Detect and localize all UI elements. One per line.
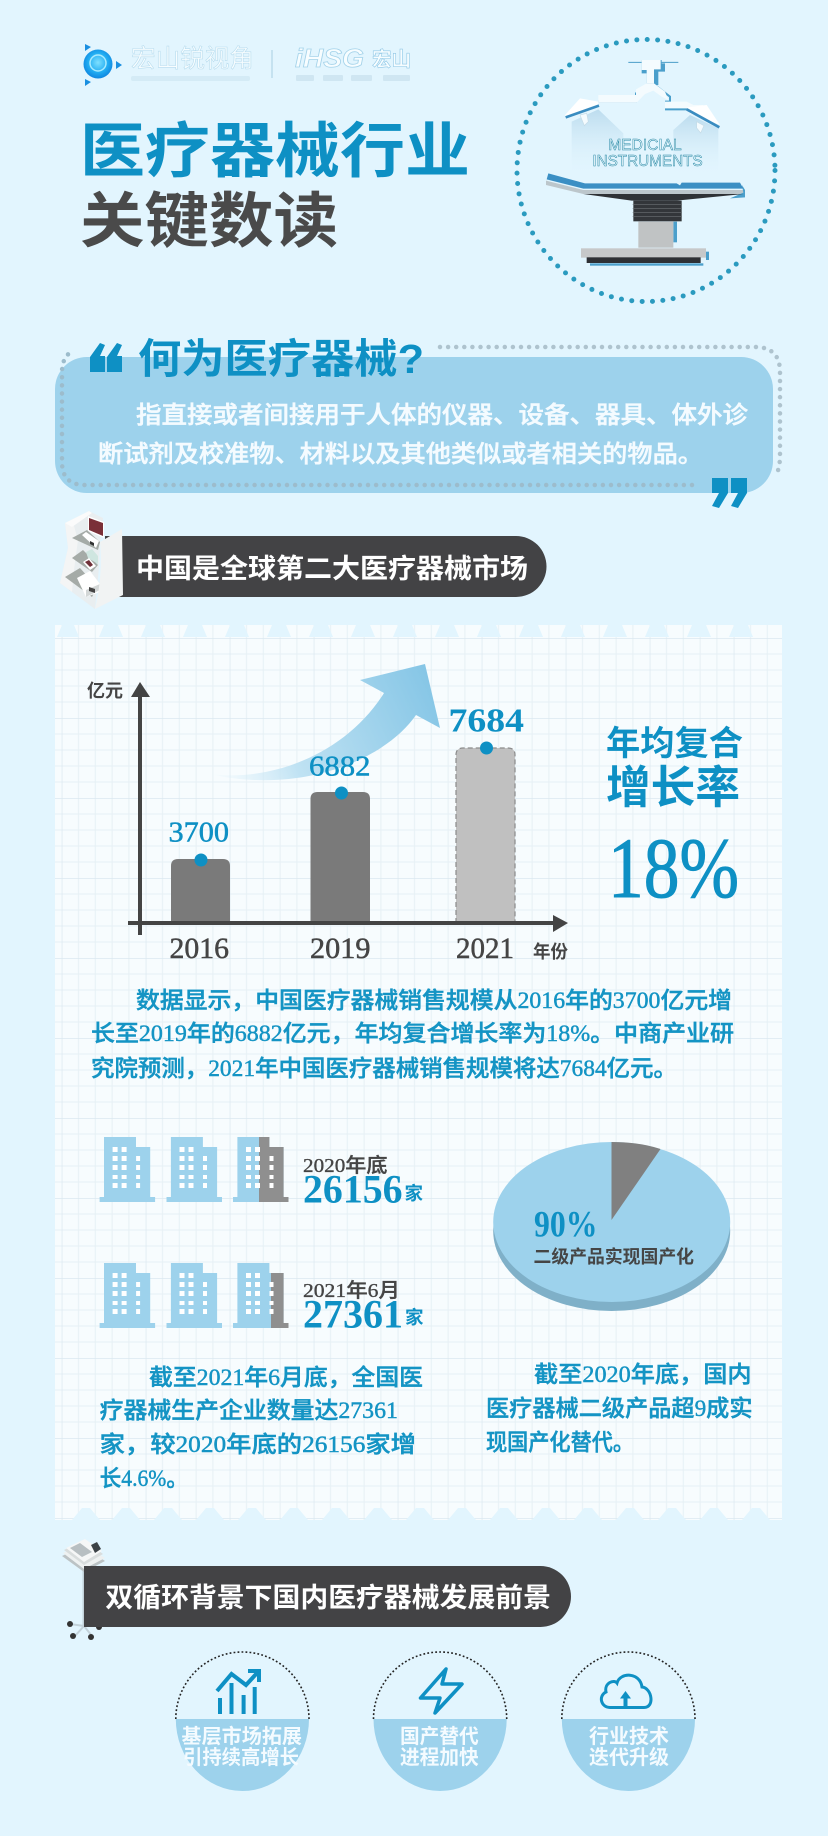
icon: lightning bolt <box>420 1669 462 1713</box>
pie chart: 90% localisation: 二级产品实现国产化 <box>534 1246 694 1267</box>
section heading: dual circulation <box>84 1566 571 1627</box>
icon: equipment shelf <box>60 511 123 609</box>
illustration label <box>592 137 703 170</box>
definition text: 指直接或者间接用于人体的仪器、设备、器具、体外诊 <box>136 402 748 429</box>
text block: class II localisation <box>486 1362 752 1455</box>
title: 医疗器械行业 <box>80 118 470 185</box>
section heading: China market: 中国是全球第二大医疗器械市场 <box>136 554 528 584</box>
icon: growth chart <box>217 1671 259 1714</box>
pie chart: 90% localisation: 90% <box>534 1204 598 1246</box>
icon: instrument cart <box>62 1539 105 1640</box>
text block: market description <box>91 988 734 1081</box>
stat: 2021 enterprise count: 家 <box>405 1307 424 1328</box>
badge: grassroots market <box>176 1652 309 1791</box>
text block: class II localisation: 现国产化替代。 <box>486 1430 634 1455</box>
badge: technology iteration: 行业技术 <box>589 1725 669 1748</box>
heading: 何为医疗器械? <box>138 336 424 382</box>
brand mark: iHSG <box>295 43 364 73</box>
illustration label: MEDICIAL <box>608 137 682 154</box>
text block: market description: 数据显示，中国医疗器械销售规模从2016年的3700亿元增 <box>136 988 732 1013</box>
callout: CAGR 18%: 年均复合 <box>606 725 743 763</box>
text block: enterprise count: 截至2021年6月底，全国医 <box>149 1365 423 1390</box>
icon: closing quote <box>712 478 747 508</box>
icon row: buildings June 2021 <box>100 1263 288 1328</box>
icon row: buildings end of 2020 <box>100 1137 288 1202</box>
title <box>80 118 470 255</box>
illustration: operating table in dotted circle <box>517 40 775 302</box>
callout: CAGR 18%: 增长率 <box>606 762 740 813</box>
bar 2016 <box>168 816 230 965</box>
section heading: dual circulation: 双循环背景下国内医疗器械发展前景 <box>105 1583 551 1613</box>
bar 2021 forecast <box>448 702 524 965</box>
text block: market description: 长至2019年的6882亿元，年均复合增长率为18%。中商产业研 <box>91 1021 734 1046</box>
text block: enterprise count: 家，较2020年底的26156家增 <box>100 1432 416 1457</box>
stat: 2020 enterprise count <box>303 1154 424 1212</box>
y axis: 亿元 <box>87 681 123 701</box>
bar 2019: 2019 <box>310 932 370 965</box>
text block: enterprise count <box>100 1365 423 1491</box>
section heading: China market <box>105 536 546 597</box>
stat: 2021 enterprise count: 2021年6月 <box>303 1279 400 1302</box>
icon: cloud upload <box>601 1675 651 1708</box>
illustration label: INSTRUMENTS <box>592 153 703 170</box>
badge: grassroots market: 基层市场拓展 <box>182 1724 302 1748</box>
callout: CAGR 18%: 18% <box>608 820 739 916</box>
bar 2019: 6882 <box>309 750 370 782</box>
callout: CAGR 18% <box>606 725 743 916</box>
pie chart: 90% localisation <box>493 1142 730 1311</box>
panel: graph paper <box>55 625 782 1520</box>
title: 关键数读 <box>80 188 338 255</box>
bar chart: market size <box>87 664 568 965</box>
definition text <box>98 402 748 468</box>
bar 2016: 2016 <box>170 932 229 965</box>
icon: opening quote <box>90 343 122 372</box>
panel: what are medical instruments <box>55 336 780 508</box>
bar 2021 forecast: 2021 <box>456 932 514 965</box>
badge: technology iteration <box>562 1652 695 1791</box>
text block: enterprise count: 疗器械生产企业数量达27361 <box>100 1398 398 1423</box>
bar 2016: 3700 <box>168 816 229 848</box>
x axis: 年份 <box>533 941 568 962</box>
text block: enterprise count: 长4.6%。 <box>100 1466 188 1491</box>
badge: grassroots market: 引持续高增长 <box>183 1745 299 1769</box>
stat: 2021 enterprise count: 27361 <box>303 1292 403 1336</box>
text block: class II localisation: 截至2020年底，国内 <box>534 1362 752 1387</box>
badge: technology iteration: 迭代升级 <box>589 1746 669 1769</box>
stat: 2021 enterprise count <box>303 1279 424 1336</box>
logo: Hongshan brand header <box>84 43 411 86</box>
growth arrow <box>210 664 440 780</box>
stat: 2020 enterprise count: 26156 <box>303 1166 403 1212</box>
y axis <box>87 681 150 935</box>
stat: 2020 enterprise count: 2020年底 <box>303 1154 388 1177</box>
text block: class II localisation: 医疗器械二级产品超9成实 <box>486 1396 752 1421</box>
definition text: 断试剂及校准物、材料以及其他类似或者相关的物品。 <box>98 441 703 468</box>
bar 2021 forecast: 7684 <box>448 702 524 740</box>
text block: market description: 究院预测，2021年中国医疗器械销售规模将达7684亿元。 <box>91 1056 677 1081</box>
stat: 2020 enterprise count: 家 <box>404 1183 424 1204</box>
badge: domestic substitution <box>374 1652 507 1791</box>
logo: Hongshan brand header: 宏山 <box>372 47 411 71</box>
icon: lens logo <box>84 44 122 86</box>
brand name: 宏山锐视角 <box>131 45 254 73</box>
badge: domestic substitution: 进程加快 <box>400 1746 479 1769</box>
badge: domestic substitution: 国产替代 <box>400 1725 479 1748</box>
x axis <box>128 915 568 962</box>
bar 2019 <box>309 750 370 965</box>
